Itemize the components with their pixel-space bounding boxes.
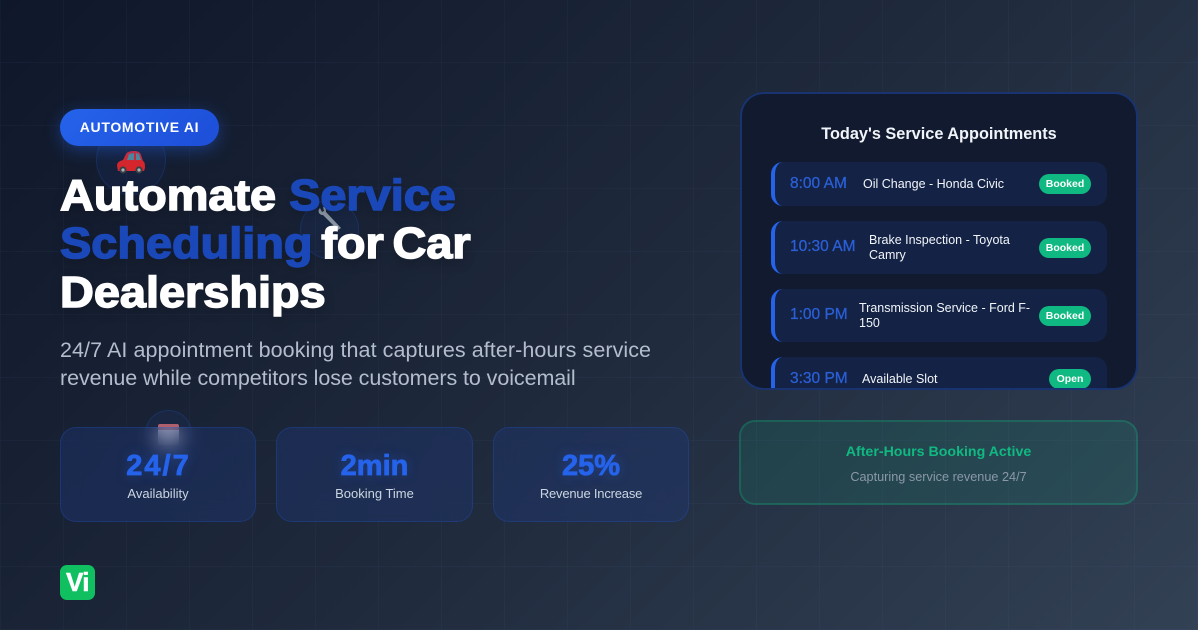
appointment: available slot: Open bbox=[1057, 373, 1083, 385]
title: Dealerships bbox=[60, 268, 326, 317]
appointment: brake inspection: Booked bbox=[1046, 242, 1084, 254]
appointment: transmission service: Transmission Service - Ford F- bbox=[859, 301, 1030, 315]
stat card: availability: 24/7 bbox=[126, 450, 191, 482]
appointment: brake inspection: Brake Inspection - Toyota bbox=[869, 233, 1010, 247]
stat card: booking time: 2min bbox=[341, 450, 408, 482]
appointment: brake inspection: 10:30 AM bbox=[790, 238, 856, 255]
title bbox=[60, 171, 471, 317]
stat card: revenue increase: Revenue Increase bbox=[540, 486, 642, 501]
stat card: revenue increase: 25% bbox=[562, 450, 620, 482]
badge: automotive AI: AUTOMOTIVE AI bbox=[80, 119, 199, 135]
appointment: available slot: 3:30 PM bbox=[790, 370, 848, 387]
appointment: brake inspection: Camry bbox=[869, 248, 906, 262]
subtitle: revenue while competitors lose customers to voicemail bbox=[60, 366, 576, 390]
badge: automotive AI bbox=[60, 109, 219, 146]
logo: Vi bbox=[60, 565, 95, 600]
appointment: oil change: Booked bbox=[1046, 178, 1084, 190]
appointment: oil change: Oil Change - Honda Civic bbox=[863, 177, 1004, 191]
subtitle bbox=[60, 338, 651, 390]
appointment: available slot: Available Slot bbox=[862, 372, 938, 386]
stat card: availability bbox=[60, 427, 256, 522]
panel heading: Today's Service Appointments bbox=[821, 125, 1057, 143]
icon: wrench in circle bbox=[300, 200, 359, 259]
title: Scheduling for Car bbox=[60, 219, 471, 268]
appointment: transmission service bbox=[771, 289, 1107, 342]
stat card: revenue increase bbox=[493, 427, 689, 522]
appointment: transmission service: Booked bbox=[1046, 310, 1084, 322]
icon: calendar in circle bbox=[144, 410, 193, 459]
appointment: brake inspection bbox=[771, 221, 1107, 274]
appointment: available slot bbox=[771, 357, 1107, 410]
appointment: oil change bbox=[771, 162, 1107, 206]
panel: after-hours booking bbox=[739, 420, 1138, 505]
logo: Vi: Vi bbox=[66, 567, 89, 597]
subtitle: 24/7 AI appointment booking that captures after-hours service bbox=[60, 338, 651, 362]
stat card: availability: Availability bbox=[127, 486, 189, 501]
title: Automate Service bbox=[60, 171, 456, 220]
appointment: transmission service: 150 bbox=[859, 316, 880, 330]
after-hours heading: After-Hours Booking Active bbox=[846, 444, 1031, 460]
appointment: transmission service: 1:00 PM bbox=[790, 306, 848, 323]
icon: car in circle bbox=[96, 146, 166, 195]
stat card: booking time bbox=[276, 427, 473, 522]
stat card: booking time: Booking Time bbox=[335, 486, 414, 501]
after-hours caption: Capturing service revenue 24/7 bbox=[850, 470, 1027, 484]
appointment: oil change: 8:00 AM bbox=[790, 175, 847, 192]
panel: today's service appointments bbox=[740, 92, 1138, 390]
